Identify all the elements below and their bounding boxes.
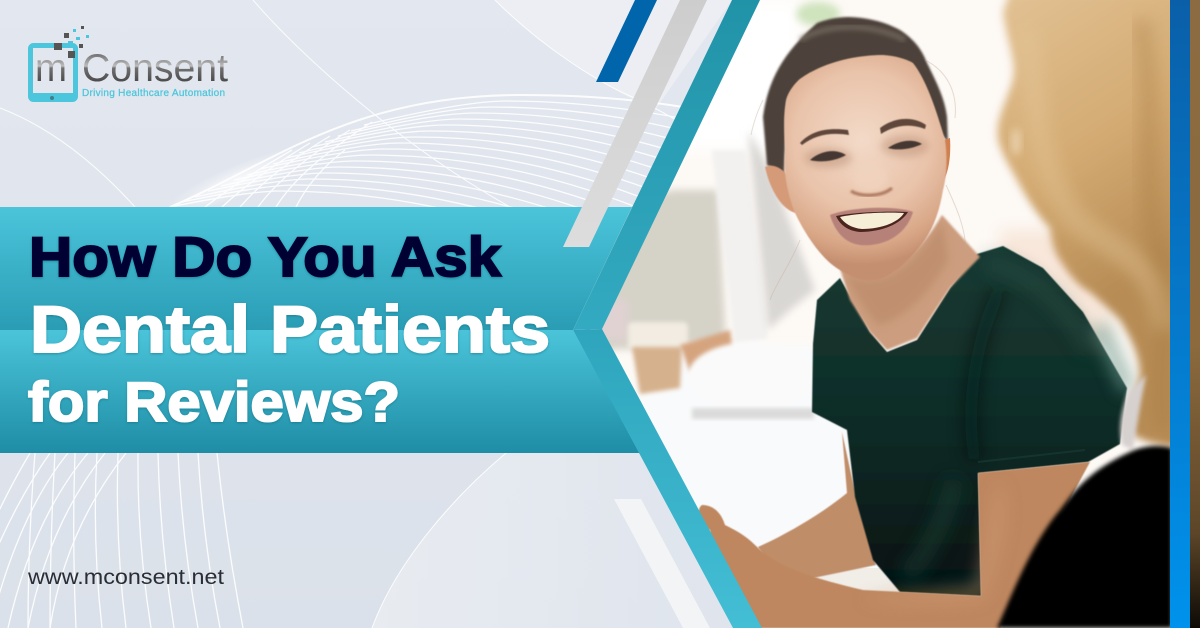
right blue vertical bar (1170, 0, 1190, 628)
lips (830, 208, 913, 245)
chevron upper arm (573, 0, 760, 330)
teeth (840, 213, 904, 229)
hair at far right edge (1190, 0, 1200, 628)
banner upper half (0, 207, 632, 330)
far arm resting on the table (758, 432, 876, 578)
banner lower half (0, 330, 640, 453)
hair light streak (1025, 30, 1165, 330)
colleague white collar (1120, 375, 1146, 450)
colleague black top (997, 446, 1172, 628)
left panel background (0, 0, 733, 628)
neck (838, 215, 980, 350)
left eye (810, 151, 846, 161)
title line 2: Dental Patients (30, 292, 550, 366)
white wave line pattern (0, 0, 700, 628)
grey diagonal stripe (563, 0, 707, 247)
teal chevron band (573, 0, 762, 628)
right ear (944, 138, 950, 180)
hair dark streak (1140, 20, 1166, 430)
website url: www.mconsent.net (27, 566, 224, 589)
nose (851, 164, 892, 195)
right eye (888, 141, 922, 149)
lighter top-right corner (495, 0, 732, 110)
title line 1: How Do You Ask (29, 225, 502, 288)
title line 3: for Reviews? (28, 370, 400, 433)
photo background: bright office (560, 0, 1200, 628)
logo: mConsent (30, 26, 228, 100)
right eyebrow (880, 119, 926, 134)
logo wordmark: Consent (82, 47, 228, 90)
sleeve hem (978, 450, 1085, 462)
neck shadow under jaw (845, 222, 948, 325)
icon: tablet outline (30, 46, 76, 100)
shirt: dark green t-shirt (812, 246, 1127, 596)
face (784, 55, 946, 280)
mouth opening (836, 212, 908, 232)
title banner (0, 207, 640, 453)
chevron lower arm (573, 329, 762, 628)
hair highlight (1011, 128, 1021, 156)
loose hair strands (751, 60, 966, 300)
photo: smiling woman talking with blonde colleague (560, 0, 1200, 628)
thin long arcs (253, 0, 510, 207)
hair: dark pulled-back hair (763, 17, 948, 175)
icon: pixel squares (54, 26, 89, 58)
shirt highlights and folds (905, 262, 1128, 575)
hair highlight on crown (800, 27, 905, 40)
arm highlight (860, 480, 1006, 604)
blonde colleague hair (997, 0, 1178, 448)
eye socket shadows (804, 135, 929, 168)
left eyebrow (800, 129, 849, 145)
pale diagonal stripe (614, 499, 710, 628)
logo tagline: Driving Healthcare Automation (82, 88, 225, 99)
blue diagonal stripe (596, 0, 657, 82)
logo wordmark: m (35, 47, 67, 90)
left ear (765, 166, 796, 213)
soft glow near wave start (160, 135, 320, 225)
near arm and hand (699, 462, 1090, 628)
lower-left arcs (217, 453, 243, 628)
title text (28, 225, 550, 433)
lighter bottom arc area (372, 453, 733, 628)
